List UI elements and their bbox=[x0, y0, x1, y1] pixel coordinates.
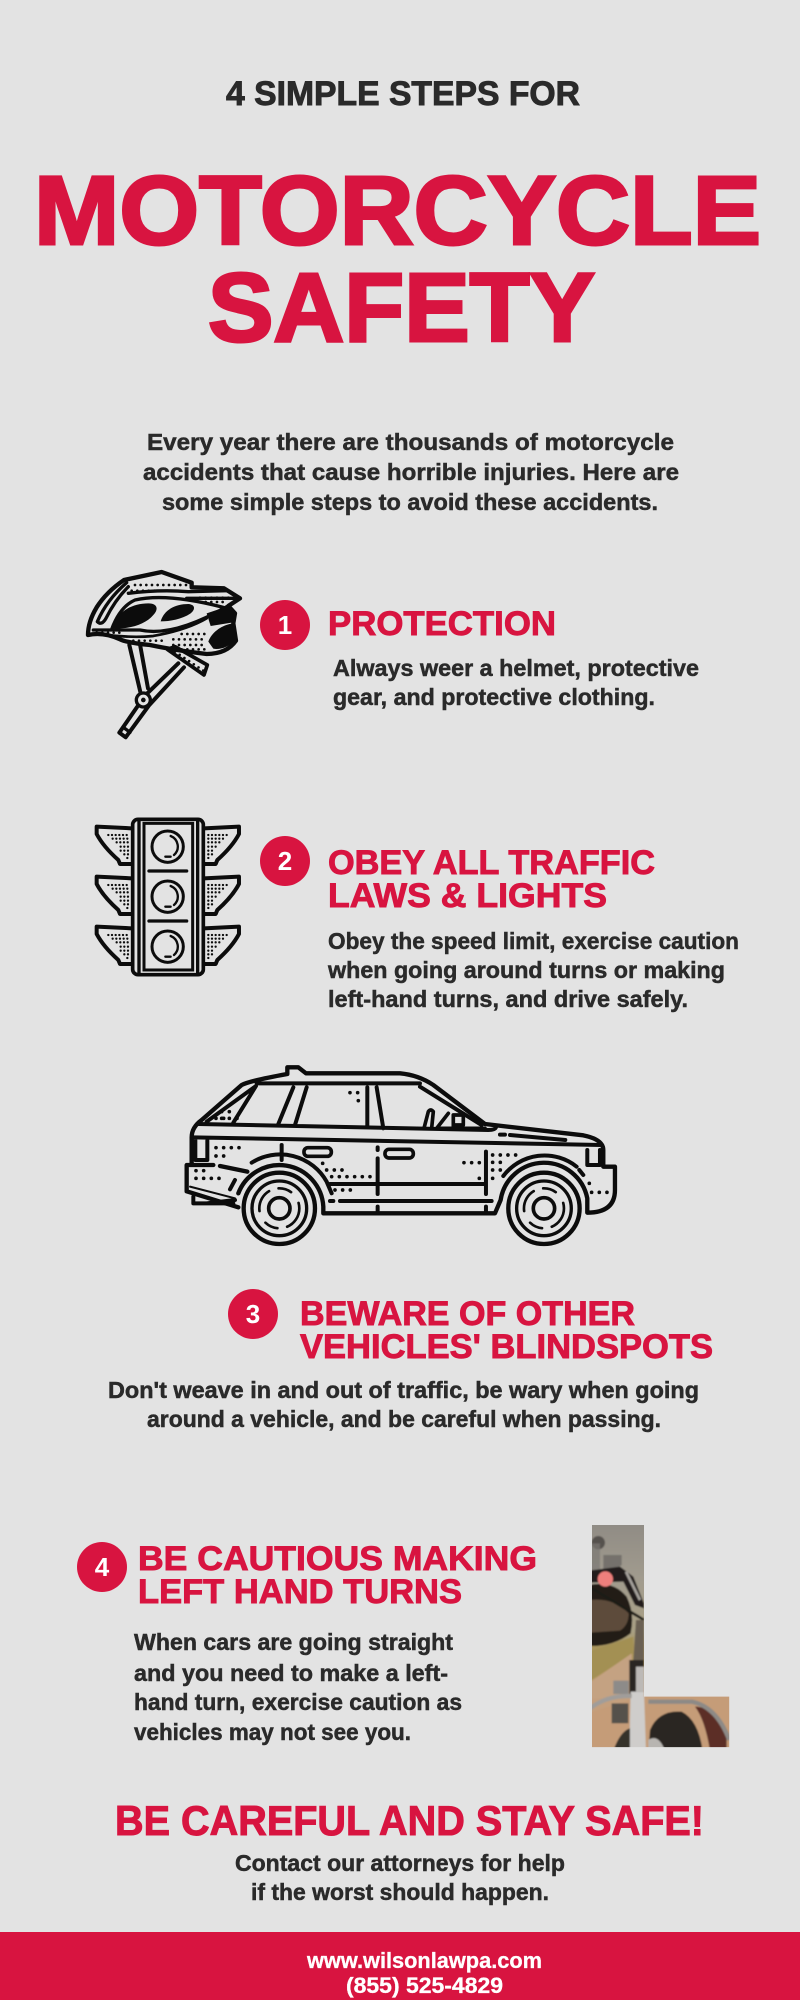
panel: step 3 blindspots bbox=[108, 1289, 713, 1432]
panel: step 2 traffic laws bbox=[260, 836, 739, 1012]
closing text: Contact our attorneys for help bbox=[235, 1850, 565, 1876]
number badge 4 bbox=[77, 1542, 127, 1592]
body: protection: gear, and protective clothing. bbox=[333, 684, 655, 710]
number badge 2 bbox=[260, 836, 310, 886]
body: left hand turns: hand turn, exercise caution as bbox=[134, 1689, 462, 1715]
body: traffic laws: when going around turns or making bbox=[327, 957, 725, 983]
number badge 1: 1 bbox=[278, 610, 292, 640]
heading: be cautious making left hand turns: BE CAUTIOUS MAKING bbox=[138, 1540, 537, 1578]
heading: obey all traffic laws: LAWS & LIGHTS bbox=[328, 877, 607, 915]
body: left hand turns bbox=[134, 1629, 462, 1745]
footer phone: (855) 525-4829 bbox=[346, 1973, 503, 1998]
heading: beware of other vehicles: VEHICLES' BLINDSPOTS bbox=[300, 1328, 713, 1366]
intro text: Every year there are thousands of motorcycle bbox=[147, 429, 674, 455]
body: left hand turns: and you need to make a left- bbox=[134, 1660, 448, 1686]
body: protection: Always weer a helmet, protective bbox=[333, 655, 699, 681]
closing heading: BE CAREFUL AND STAY SAFE! bbox=[115, 1797, 704, 1844]
number badge 2: 2 bbox=[278, 846, 292, 876]
heading: obey all traffic laws: OBEY ALL TRAFFIC bbox=[328, 844, 655, 882]
intro text: some simple steps to avoid these accidents. bbox=[162, 489, 658, 515]
panel: step 4 left hand turns bbox=[77, 1540, 537, 1745]
number badge 3 bbox=[228, 1289, 278, 1339]
closing text bbox=[235, 1850, 565, 1905]
body: blindspots bbox=[108, 1377, 699, 1432]
title: motorcycle safety: MOTORCYCLE bbox=[34, 156, 761, 265]
number badge 4: 4 bbox=[95, 1552, 110, 1582]
photo: motorcycle in letter L shape bbox=[589, 1522, 733, 1751]
intro text: accidents that cause horrible injuries. Here are bbox=[143, 459, 679, 485]
intro text bbox=[143, 429, 679, 515]
title: motorcycle safety bbox=[34, 156, 761, 362]
body: left hand turns: vehicles may not see you. bbox=[134, 1719, 411, 1745]
number badge 1 bbox=[260, 600, 310, 650]
heading: be cautious making left hand turns bbox=[138, 1540, 537, 1611]
footer bar bbox=[0, 1932, 800, 2000]
body: traffic laws: left-hand turns, and drive safely. bbox=[328, 986, 688, 1012]
heading: be cautious making left hand turns: LEFT HAND TURNS bbox=[138, 1573, 462, 1611]
footer website: www.wilsonlawpa.com bbox=[306, 1948, 542, 1973]
heading: protection: PROTECTION bbox=[328, 605, 556, 643]
body: traffic laws: Obey the speed limit, exercise caution bbox=[328, 928, 739, 954]
icon: car bbox=[187, 1067, 615, 1244]
heading: beware of other vehicles bbox=[300, 1295, 713, 1366]
body: blindspots: around a vehicle, and be careful when passing. bbox=[147, 1406, 661, 1432]
icon: helmet bbox=[88, 572, 240, 737]
title: kicker: 4 SIMPLE STEPS FOR bbox=[226, 75, 580, 113]
closing text: if the worst should happen. bbox=[251, 1879, 549, 1905]
heading: beware of other vehicles: BEWARE OF OTHER bbox=[300, 1295, 635, 1333]
body: blindspots: Don't weave in and out of traffic, be wary when going bbox=[108, 1377, 699, 1403]
body: left hand turns: When cars are going straight bbox=[134, 1629, 453, 1655]
heading: obey all traffic laws bbox=[328, 844, 655, 915]
icon: traffic light bbox=[97, 819, 239, 975]
panel: step 1 protection bbox=[260, 600, 699, 710]
body: traffic laws bbox=[327, 928, 739, 1012]
body: protection bbox=[333, 655, 699, 710]
title: motorcycle safety: SAFETY bbox=[208, 253, 595, 362]
number badge 3: 3 bbox=[246, 1299, 260, 1329]
